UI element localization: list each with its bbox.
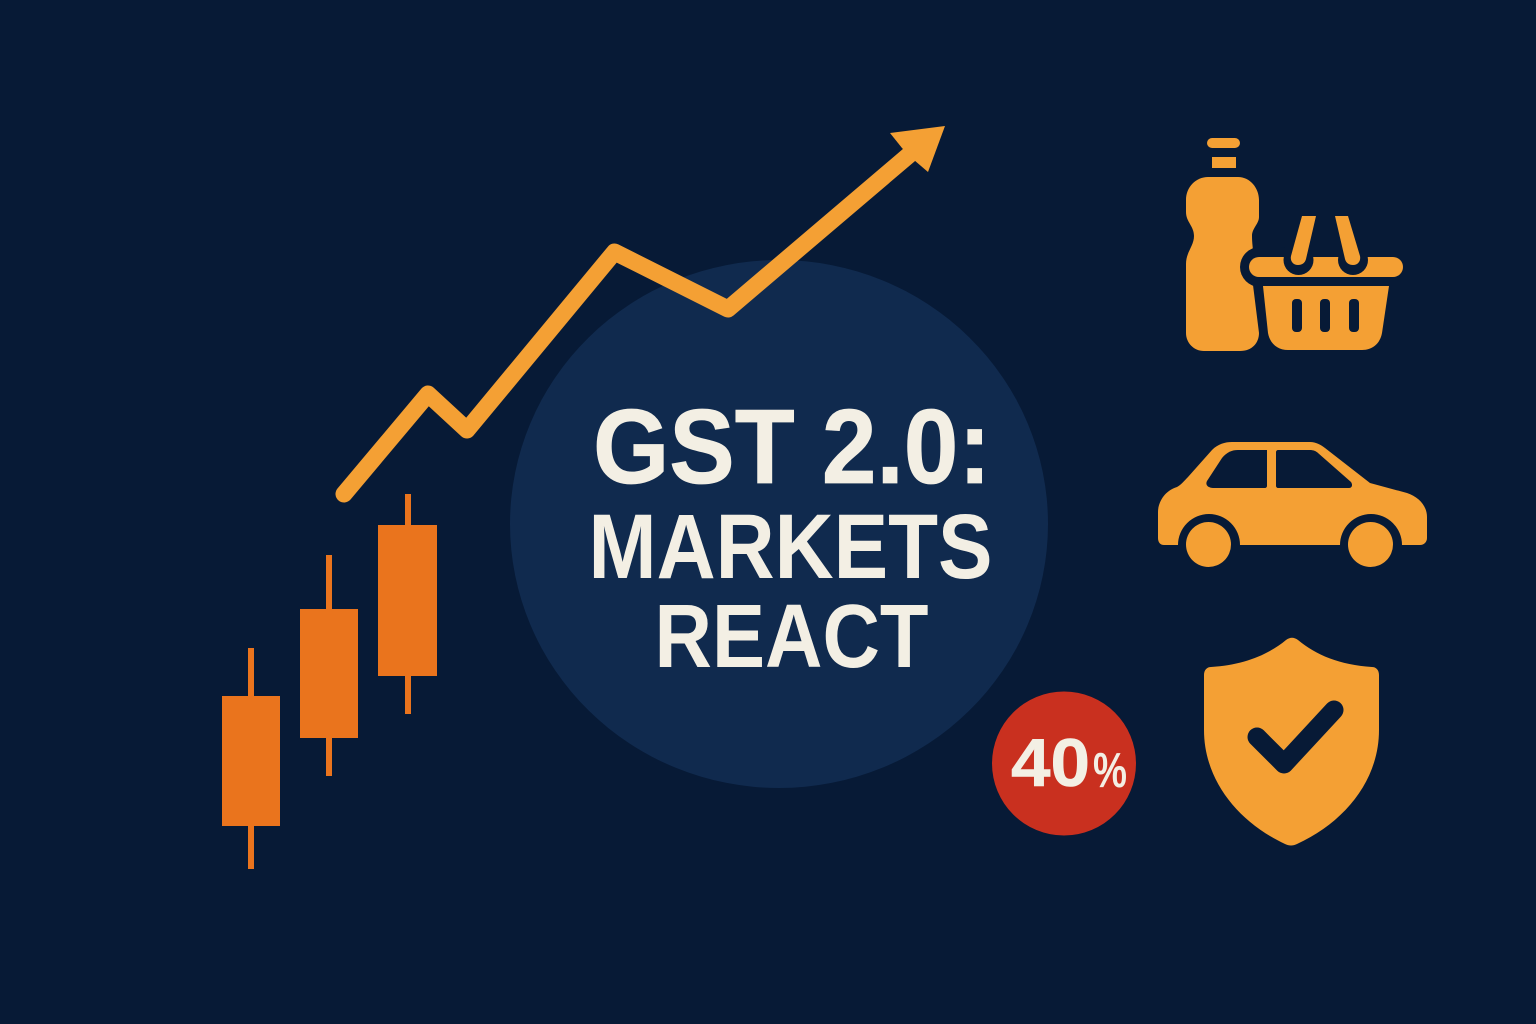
title: REACT [654, 587, 929, 687]
badge: 40%: % [1093, 744, 1127, 798]
central circle [510, 260, 1048, 788]
title: MARKETS [588, 496, 992, 598]
title: GST 2.0: [593, 388, 991, 506]
rising arrow line [344, 126, 945, 494]
icon: shield with check [1204, 638, 1379, 846]
icon: car [1158, 442, 1427, 567]
icon: bottle and basket [1186, 138, 1403, 351]
candlestick chart [222, 494, 437, 869]
badge: 40%: 40 [1011, 725, 1090, 801]
title [588, 388, 992, 687]
badge: 40% [992, 692, 1136, 836]
